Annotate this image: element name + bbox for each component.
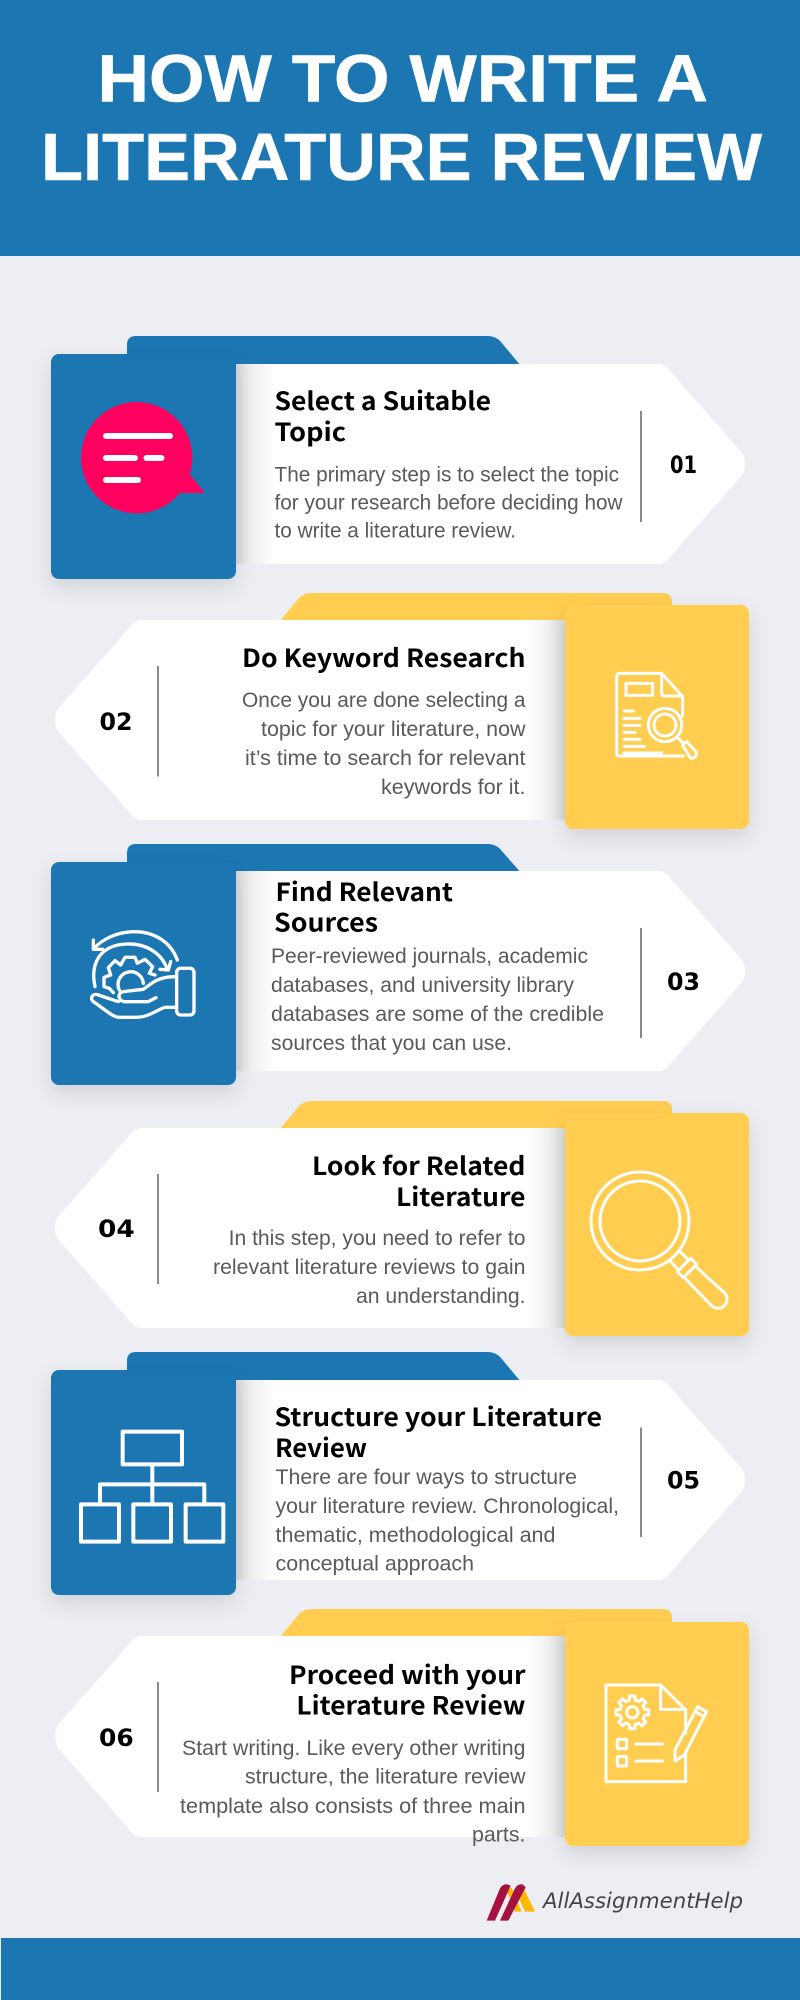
body text: step 01: The primary step is to select the topic [274,464,619,486]
heading: step 04 [312,1147,526,1214]
heading: step 06: Literature Review [296,1687,526,1723]
body text: step 06: structure, the literature review [245,1766,526,1789]
body text: step 05: your literature review. Chronological, [276,1495,619,1518]
body text: step 05 [276,1466,619,1576]
body text: step 02: keywords for it. [381,776,526,799]
heading: step 05: Structure your Literature [274,1398,602,1434]
logo: AllAssignmentHelp [487,1884,743,1921]
body text: step 05: thematic, methodological and [276,1524,556,1547]
body text: step 02: topic for your literature, now [261,718,526,741]
heading: step 03: Find Relevant [276,873,453,909]
icon: magnifying glass [591,1172,727,1308]
body text: step 04: relevant literature reviews to gain [213,1256,526,1279]
icon: document with gear and pencil [606,1685,707,1782]
number 03: 03 [667,968,700,996]
body text: step 02: Once you are done selecting a [242,689,526,712]
body text: step 02 [242,689,526,799]
panel: step 01 [51,336,745,579]
heading: step 01 [274,382,491,449]
logo wordmark: AllAssignmentHelp [541,1889,743,1914]
heading: step 01: Select a Suitable [274,382,491,418]
heading: step 01: Topic [274,413,346,449]
icon: hand with gear [92,932,194,1017]
title [41,42,763,195]
heading: step 05 [274,1398,602,1465]
number 06: 06 [99,1724,134,1752]
body text: step 06: Start writing. Like every other writing [182,1737,526,1760]
number 05: 05 [667,1467,700,1495]
panel: step 03 [51,844,745,1085]
icon: speech bubble [81,402,205,513]
panel: step 02 [55,593,749,829]
body text: step 03 [271,945,604,1055]
heading: step 06 [289,1656,526,1723]
body text: step 05: There are four ways to structure [276,1466,577,1489]
body text: step 01: to write a literature review. [274,520,516,542]
body text: step 04: In this step, you need to refer to [229,1227,526,1250]
body text: step 01: for your research before deciding how [274,492,623,514]
header band with title [0,0,800,256]
panel: step 06 [55,1609,749,1847]
icon: document with magnifier [617,673,696,758]
heading: step 04: Look for Related [312,1147,526,1183]
title: HOW TO WRITE A [98,42,708,116]
heading: step 03: Sources [274,904,378,940]
number 01: 01 [670,451,697,479]
number 02: 02 [100,708,132,736]
footer band [1,1938,800,2000]
panel: step 05 [51,1352,745,1595]
body text: step 03: sources that you can use. [271,1032,512,1055]
body text: step 06: template also consists of three main [180,1795,526,1818]
icon: logo mark [487,1884,535,1921]
body text: step 03: Peer-reviewed journals, academic [271,945,588,968]
body text: step 03: databases are some of the credible [271,1003,604,1026]
body text: step 02: it’s time to search for relevant [245,747,526,770]
body text: step 06: parts. [472,1824,526,1847]
icon: hierarchy chart [81,1432,223,1542]
heading: step 05: Review [275,1429,367,1465]
body text: step 05: conceptual approach [276,1553,474,1576]
body text: step 01 [274,464,623,542]
heading: step 06: Proceed with your [289,1656,526,1692]
heading: step 02: Do Keyword Research [242,639,526,675]
body text: step 04: an understanding. [356,1285,526,1308]
body text: step 04 [213,1227,526,1308]
panel: step 04 [55,1101,749,1336]
body text: step 03: databases, and university library [271,974,574,997]
title: LITERATURE REVIEW [41,120,763,195]
heading: step 03 [274,873,453,940]
number 04: 04 [98,1215,135,1243]
body text: step 06 [180,1737,526,1847]
heading: step 04: Literature [396,1178,526,1214]
